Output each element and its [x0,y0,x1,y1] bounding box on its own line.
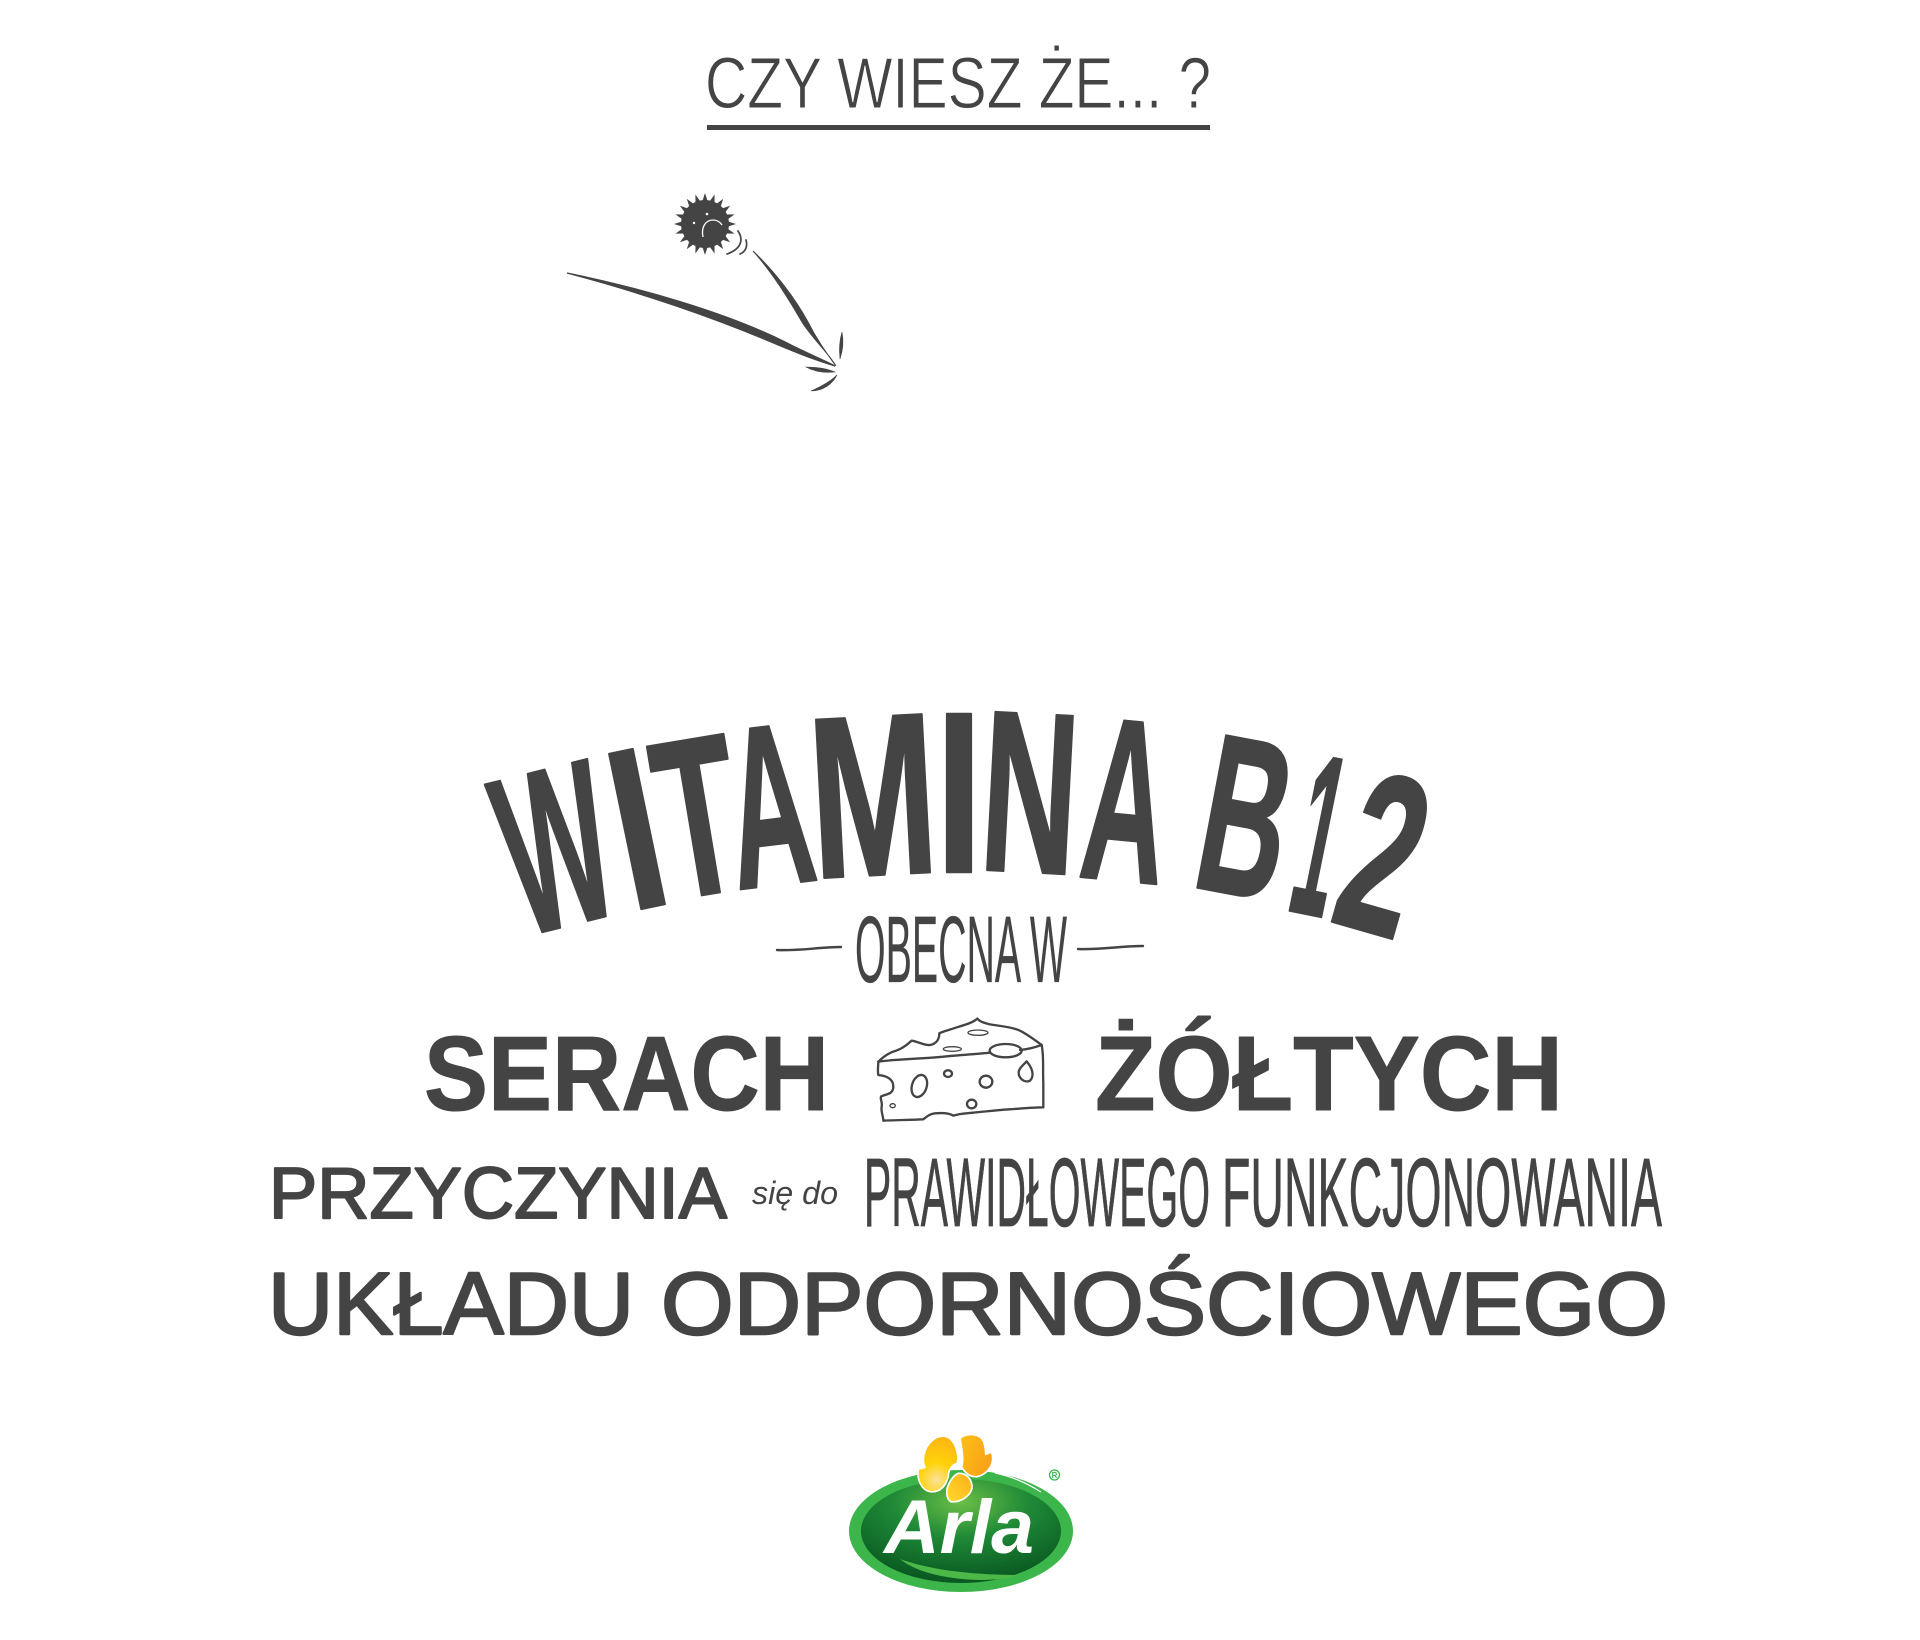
logo registered mark: R [1052,1471,1058,1480]
dandelion stems [753,251,836,366]
heading: WITAMINA B12 arched lettering: W [473,712,638,985]
logo: Arla [849,1435,1073,1592]
heading: WITAMINA B12 arched lettering: 1 [1275,707,1365,966]
text: UKŁADU ODPORNOŚCIOWEGO: UKŁADU [268,1254,634,1353]
logo wordmark: Arla [882,1485,1034,1570]
heading: WITAMINA B12 arched lettering: I [588,698,686,959]
heading: WITAMINA B12 arched lettering: M [803,666,943,928]
icon: dandelion [567,193,843,391]
subheading: OBECNA W with side dashes: OBECNA W [855,897,1067,1003]
text: PRZYCZYNIA: PRZYCZYNIA [269,1154,727,1234]
dandelion seed arcs [727,231,747,254]
heading: WITAMINA B12 arched lettering: A [712,672,826,939]
text: ŻÓŁTYCH: ŻÓŁTYCH [1095,1015,1563,1133]
logo registered mark [1050,1470,1060,1480]
heading: WITAMINA B12 arched lettering: I [935,664,983,921]
heading: WITAMINA B12 arched lettering: T [637,686,759,948]
dandelion head [674,193,736,255]
text: PRAWIDŁOWEGO FUNKCJONOWANIA: PRAWIDŁOWEGO [864,1138,1210,1247]
text: UKŁADU ODPORNOŚCIOWEGO [268,1254,1668,1353]
heading: WITAMINA B12 arched lettering: B [1180,687,1312,950]
heading: WITAMINA B12 arched lettering [473,662,1454,988]
text: SERACH: SERACH [424,1015,829,1133]
logo flower [918,1435,993,1502]
icon: cheese wedge [878,1019,1043,1121]
text: UKŁADU ODPORNOŚCIOWEGO: ODPORNOŚCIOWEGO [661,1254,1668,1353]
title: CZY WIESZ ŻE: CZY WIESZ ŻE... ? [705,44,1211,124]
subheading: OBECNA W with side dashes [777,897,1143,1003]
logo green oval [849,1470,1073,1592]
dandelion leaf ticks [839,332,843,359]
heading: WITAMINA B12 arched lettering: 2 [1314,723,1454,988]
text: się do: się do [752,1175,838,1211]
heading: WITAMINA B12 arched lettering: N [975,662,1085,923]
heading: WITAMINA B12 arched lettering: A [1073,667,1180,934]
